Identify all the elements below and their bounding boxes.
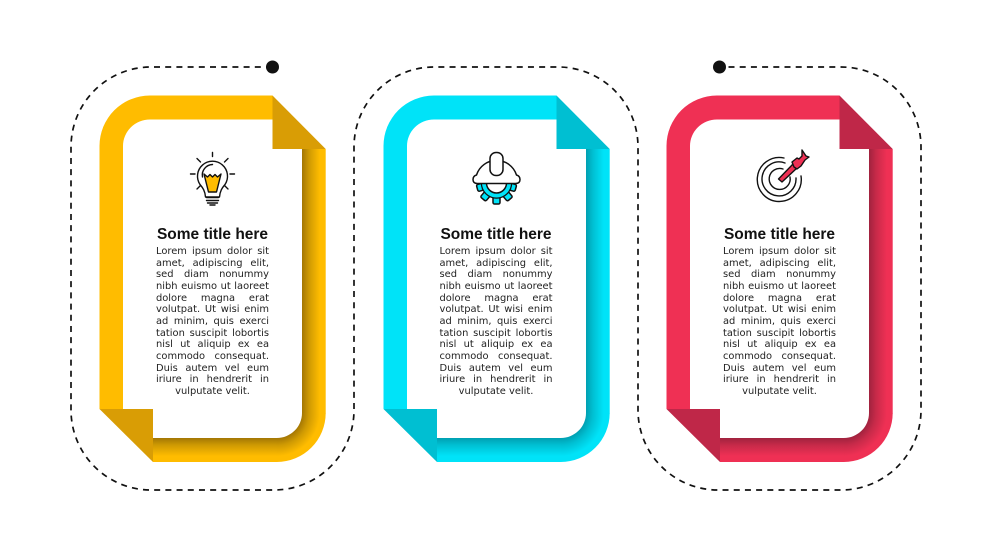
text block: Lorem ipsum dolor sit — [440, 246, 552, 257]
text block: nibh euismo ut laoreet — [440, 281, 552, 292]
text block: Lorem ipsum dolor sit — [723, 246, 836, 257]
text block: nisl ut aliquip ex ea — [440, 339, 552, 350]
text block: nisl ut aliquip ex ea — [156, 339, 269, 350]
text block: nibh euismo ut laoreet — [723, 281, 836, 292]
text block: ad minim, quis exerci — [156, 316, 269, 327]
text block: sed diam nonummy — [440, 269, 552, 280]
text block — [440, 246, 552, 397]
text block: ad minim, quis exerci — [440, 316, 552, 327]
text block: Lorem ipsum dolor sit — [156, 246, 269, 257]
icon: target with arrow — [757, 150, 809, 201]
title: Some title here — [440, 226, 552, 243]
text block: commodo consequat. — [156, 351, 269, 362]
text block: tation suscipit lobortis — [723, 328, 836, 339]
text block: Duis autem vel eum — [723, 363, 836, 374]
text block: nisl ut aliquip ex ea — [723, 339, 836, 350]
title: Some title here — [157, 226, 268, 243]
panel: red card — [666, 96, 893, 462]
text block — [156, 246, 269, 397]
icon: light bulb — [190, 152, 234, 205]
text block: amet, adipiscing elit, — [440, 258, 552, 269]
panel: yellow card — [100, 96, 326, 462]
text block: volutpat. Ut wisi enim — [156, 304, 269, 315]
title: Some title here — [724, 226, 835, 243]
text block: dolore magna erat — [156, 293, 269, 304]
text block: dolore magna erat — [723, 293, 836, 304]
text block: tation suscipit lobortis — [440, 328, 552, 339]
text block: Duis autem vel eum — [156, 363, 269, 374]
text block: dolore magna erat — [440, 293, 552, 304]
text block: volutpat. Ut wisi enim — [440, 304, 552, 315]
text block: vulputate velit. — [175, 386, 250, 397]
text block: commodo consequat. — [723, 351, 836, 362]
text block: sed diam nonummy — [156, 269, 269, 280]
panel: cyan card — [384, 96, 610, 462]
text block: volutpat. Ut wisi enim — [723, 304, 836, 315]
text block: ad minim, quis exerci — [723, 316, 836, 327]
icon: helmet with gear — [472, 152, 520, 204]
text block: iriure in hendrerit in — [723, 374, 836, 385]
text block: sed diam nonummy — [723, 269, 836, 280]
text block: iriure in hendrerit in — [440, 374, 552, 385]
text block: vulputate velit. — [742, 386, 817, 397]
text block: Duis autem vel eum — [440, 363, 552, 374]
text block — [723, 246, 836, 397]
text block: tation suscipit lobortis — [156, 328, 269, 339]
text block: vulputate velit. — [459, 386, 533, 397]
text block: nibh euismo ut laoreet — [156, 281, 269, 292]
text block: iriure in hendrerit in — [156, 374, 269, 385]
text block: amet, adipiscing elit, — [156, 258, 269, 269]
text block: amet, adipiscing elit, — [723, 258, 836, 269]
text block: commodo consequat. — [440, 351, 552, 362]
